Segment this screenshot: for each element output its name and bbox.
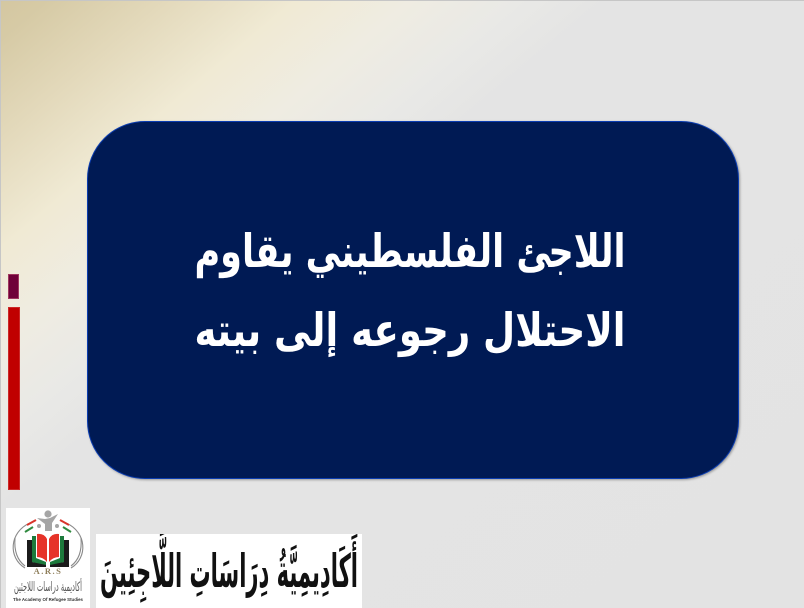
panel: title card	[87, 121, 739, 479]
icon: arcs	[13, 523, 83, 568]
title text	[194, 224, 626, 358]
icon: book	[27, 534, 69, 567]
logo initials: A.R.S	[34, 566, 62, 576]
logo: Academy of Refugee Studies emblem	[6, 508, 90, 608]
logo English name: The Academy Of Refugee Studies	[13, 597, 83, 602]
accent bar: red	[8, 307, 20, 490]
accent bar: maroon	[8, 274, 19, 299]
icon: figure	[37, 510, 59, 531]
